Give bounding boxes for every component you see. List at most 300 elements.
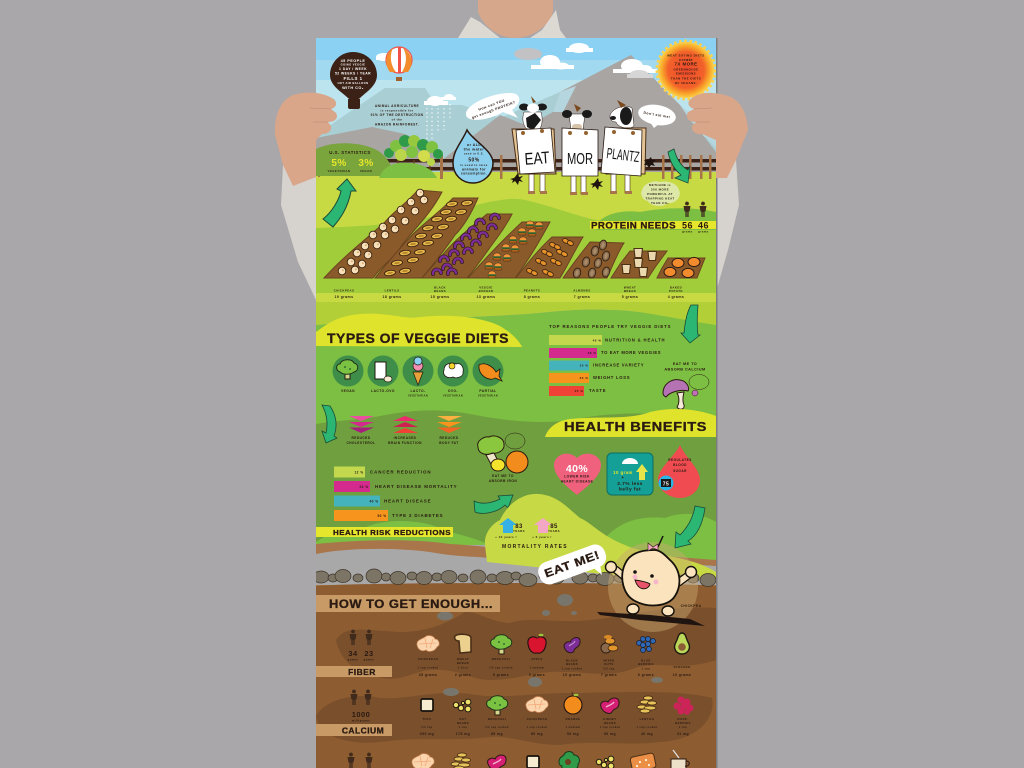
row labels strip: VEGGIE <box>479 286 493 290</box>
calcium food: chickpeas: 1 cup cooked <box>527 726 547 729</box>
poster edge <box>716 38 718 768</box>
mushroom calcium: ABSORB CALCIUM <box>664 368 706 372</box>
row: chickpeas <box>324 189 442 278</box>
calcium food: tofu: TOFU <box>422 717 432 721</box>
calcium food: chickpeas: CHICKPEAS <box>527 717 547 721</box>
icon: ovo fried egg: OVO- <box>448 389 458 393</box>
bar: heart disease: 40 % <box>369 500 379 504</box>
sun statistic: GREENHOUSE <box>673 68 699 72</box>
arrow: female years <box>534 518 552 533</box>
row labels strip: BLACK <box>434 286 446 290</box>
fiber food: avocado <box>673 633 691 677</box>
calcium food: kidney beans: KIDNEY <box>603 717 617 721</box>
lower hills <box>316 521 490 545</box>
fiber food: chickpeas: 1 cup cooked <box>418 666 438 670</box>
fiber food: blueberries <box>636 636 656 677</box>
methane cloud: THAN CO₂ <box>651 201 669 205</box>
neck <box>478 0 553 38</box>
left sleeve <box>281 165 317 302</box>
rainforest statistic: of the <box>392 118 402 122</box>
row: lentils <box>375 198 478 278</box>
U.S. statistics hill <box>316 143 392 176</box>
right hand <box>687 93 748 178</box>
bar: veggies <box>549 348 661 358</box>
bathroom scale: + <box>622 475 625 480</box>
water drop statistic: or ALL <box>467 143 481 147</box>
cow flies <box>510 157 656 190</box>
calcium food: kidney beans: 50 mg <box>604 732 616 736</box>
hot air balloon with cloud <box>376 47 412 81</box>
sky bands <box>316 38 716 137</box>
cow 1 with EAT sign: EAT <box>524 148 550 169</box>
green arrow: right <box>474 495 513 513</box>
row labels strip <box>316 286 716 302</box>
triangles: body fat: BODY FAT <box>439 441 459 445</box>
fiber food: avocado: AVOCADO <box>673 665 691 669</box>
cow 2 with MOR sign: MOR <box>567 151 593 168</box>
calcium food: orange: 52 mg <box>567 732 579 736</box>
eat me bubble <box>535 542 609 587</box>
mid band hills <box>316 302 716 325</box>
bar: taste <box>549 386 606 396</box>
row labels strip: 8 grams <box>524 295 540 299</box>
fiber needs: 23 <box>364 649 374 658</box>
mushroom calcium <box>663 362 709 409</box>
dark balloon statistic <box>330 52 377 109</box>
bar: variety <box>549 360 644 370</box>
U.S. statistics hill: 3% <box>358 158 374 169</box>
sun statistic: OF VEGANS. <box>675 81 697 85</box>
bar: cancer <box>334 466 431 478</box>
calcium food: kidney beans <box>600 698 620 736</box>
left hand <box>275 93 337 186</box>
benefit triangles <box>346 416 462 445</box>
broccoli iron group <box>478 433 528 483</box>
calcium band <box>316 724 392 736</box>
cow 1 with EAT sign <box>512 96 556 194</box>
fiber food: avocado: 10 grams <box>673 673 691 677</box>
row labels strip: BEANS <box>434 289 446 293</box>
green arrow: left <box>322 405 337 443</box>
row labels strip: 18 grams <box>383 295 401 299</box>
stones <box>313 569 716 586</box>
icon: lacto-ovo milk: LACTO-OVO <box>371 389 395 393</box>
calcium food: raspberries: RASP- <box>678 717 688 721</box>
chickpea label: CHICKPEA <box>681 604 702 608</box>
speech bubble: protein question: get enough PROTEIN? <box>471 100 516 120</box>
water drop statistic: used in U.S. <box>464 152 484 156</box>
sun statistic: EMISSIONS <box>676 72 696 76</box>
fiber food: black beans: BEANS <box>566 662 578 666</box>
person holding the poster <box>281 0 739 302</box>
bar: nutrition <box>549 335 665 345</box>
chickpea character <box>597 536 705 632</box>
fiber food: mixed nuts: MIXED <box>603 658 615 662</box>
row labels strip: POTATO <box>669 289 683 293</box>
row labels strip: BREAD <box>624 289 636 293</box>
mushroom calcium: EAT ME TO <box>673 362 697 366</box>
speech bubble: protein question: How can YOU <box>478 98 505 112</box>
row labels strip: ALMONDS <box>573 288 591 292</box>
fiber food: mixed nuts <box>601 635 618 677</box>
fiber needs: 34 <box>348 649 358 658</box>
mortality rates: YEARS <box>513 529 525 533</box>
calcium food: tofu: 350 mg <box>420 732 434 736</box>
fiber food: wheat bread: 2 grams <box>455 673 471 677</box>
mortality rates: 83 <box>515 524 523 530</box>
fiber food: broccoli: 1/2 cup cooked <box>489 666 513 670</box>
row labels strip: CHICKPEAS <box>334 288 354 292</box>
fiber food: wheat bread: BREAD <box>457 661 469 665</box>
top reasons chart <box>549 324 671 396</box>
dark balloon statistic: HOT AIR BALLOON <box>338 81 368 85</box>
calcium food: tofu <box>420 699 434 736</box>
fiber food: apple: 5 grams <box>529 673 545 677</box>
protein needs band: 56 <box>682 220 693 230</box>
calcium food: broccoli: 89 mg <box>491 732 503 736</box>
icon: ovo fried egg <box>438 356 468 398</box>
bar: diabetes: TYPE 2 DIABETES <box>392 513 443 518</box>
calcium food: broccoli: BROCCOLI <box>488 717 506 721</box>
eat me bubble: EAT ME! <box>543 549 602 580</box>
speech bubble: don't eat me <box>638 104 676 128</box>
protein needs band <box>590 202 716 234</box>
rainforest statistic: 91% OF THE DESTRUCTION <box>371 113 424 117</box>
icon: lacto ice cream <box>402 356 434 398</box>
calcium food: soy beans: SOY <box>459 717 467 721</box>
U.S. statistics hill: VEGETARIAN <box>328 169 350 173</box>
fiber needs: grams <box>348 658 358 662</box>
triangles: cholesterol: CHOLESTEROL <box>346 441 376 445</box>
bathroom scale: 3.7% less <box>617 481 643 487</box>
bathroom scale: belly fat <box>619 486 641 492</box>
row: almonds <box>563 239 624 279</box>
fiber food: apple <box>528 634 546 677</box>
health benefit heart: 40% <box>566 463 588 475</box>
bar: heart disease <box>334 496 431 506</box>
water drop statistic: the water <box>464 148 484 152</box>
grey mountains <box>316 55 716 180</box>
soil top strip <box>316 540 716 600</box>
sun statistic: MEAT EATING DIETS <box>667 54 705 58</box>
dark balloon statistic: FILLS 1 <box>343 76 363 81</box>
rainforest statistic: is responsible for <box>380 108 414 112</box>
rainforest statistic: AMAZON RAINFOREST. <box>375 122 419 126</box>
bar: taste: 25 % <box>575 389 583 393</box>
fiber food: wheat bread: 1 slice <box>458 666 468 670</box>
fence <box>316 155 716 179</box>
bar: heart mortality <box>334 481 457 492</box>
fiber band <box>316 666 392 677</box>
stray soil rocks <box>437 594 663 696</box>
row labels strip: LENTILS <box>385 288 399 292</box>
trees <box>379 135 443 178</box>
fiber food: chickpeas: CHICKPEAS <box>418 657 438 661</box>
blood drop: REGULATES <box>668 458 692 462</box>
icon: lacto ice cream: LACTO- <box>410 389 426 393</box>
grass field <box>316 172 716 228</box>
methane cloud: 30X MORE <box>651 188 669 192</box>
calcium food: lentils: 40 mg <box>641 732 653 736</box>
protein needs band: 46 <box>698 220 709 230</box>
mortality rates: 85 <box>550 524 558 530</box>
fiber food: blueberries: BERRIES <box>638 662 654 666</box>
bar: cancer: CANCER REDUCTION <box>370 470 431 474</box>
fiber food: wheat bread: WHEAT <box>457 657 469 661</box>
row labels strip: PEANUTS <box>524 288 540 292</box>
methane cloud <box>641 181 680 206</box>
bar: heart mortality: 24 % <box>359 485 369 489</box>
mortality rates <box>495 518 567 550</box>
fiber food: blueberries: 1 cup <box>642 668 650 670</box>
triangles: cholesterol: REDUCED <box>352 436 371 440</box>
top reasons chart: TOP REASONS PEOPLE TRY VEGGIE DIETS <box>549 324 671 329</box>
calcium food: broccoli <box>485 696 509 736</box>
green arrow: methane <box>668 149 690 183</box>
mortality hill <box>485 494 716 580</box>
green arrow: to chickpea <box>675 506 705 548</box>
blood drop: BLOOD <box>673 463 687 467</box>
calcium food: raspberries: BERRIES <box>675 721 691 725</box>
broccoli iron group: ABSORB IRON <box>489 479 517 483</box>
blood drop: 75 <box>663 482 669 488</box>
pale back mountains <box>316 88 716 180</box>
speech bubble: don't eat me: Don't eat me! <box>643 111 671 119</box>
speech bubble: protein question <box>466 93 519 120</box>
calcium needs: 1000 <box>352 710 370 719</box>
shirt collar <box>458 10 566 38</box>
fiber food: black beans <box>562 638 582 677</box>
triangles: body fat: REDUCED <box>440 436 459 440</box>
triangles: brain: BRAIN FUNCTION <box>388 441 422 445</box>
calcium needs <box>350 690 372 722</box>
icon: partial fish <box>472 356 504 398</box>
fiber band: FIBER <box>348 667 376 677</box>
calcium band: CALCIUM <box>342 726 384 736</box>
green arrow: top right <box>681 305 700 343</box>
grey road <box>316 549 716 585</box>
sun statistic: 7X MORE <box>675 62 697 66</box>
mortality rates: + 6 years ! <box>532 535 552 539</box>
mortality rates: MORTALITY RATES <box>502 544 567 550</box>
icon: lacto-ovo milk <box>368 356 398 393</box>
calcium food: chickpeas: 80 mg <box>531 732 543 736</box>
health risk bars <box>334 466 457 521</box>
fiber food: broccoli: BROCCOLI <box>492 657 510 661</box>
methane cloud: METHANE is <box>649 183 671 187</box>
bar: diabetes <box>334 510 443 521</box>
darker field hills <box>316 199 716 300</box>
row labels strip: 19 grams <box>335 295 353 299</box>
fiber food: chickpeas: 35 grams <box>419 673 437 677</box>
bar: heart disease: HEART DISEASE <box>384 498 431 504</box>
cow 3 with PLANTZ sign <box>601 100 646 194</box>
diet icons <box>332 356 504 398</box>
fiber needs <box>348 630 374 662</box>
bar: weight loss: WEIGHT LOSS <box>593 375 630 380</box>
green arrow: field <box>323 179 356 227</box>
water drop statistic <box>453 130 493 183</box>
sun statistic: THAN THE DIETS <box>671 76 701 80</box>
U.S. statistics hill: VEGAN <box>360 169 372 173</box>
bar: weight loss <box>549 373 630 383</box>
dark balloon statistic: 45 PEOPLE <box>341 59 365 63</box>
broccoli iron group: EAT ME TO <box>492 474 514 478</box>
calcium food: raspberries: 1 cup <box>679 726 687 729</box>
calcium food: orange <box>564 692 582 736</box>
triangles: brain: INCREASED <box>394 436 417 440</box>
protein needs band: grams <box>698 230 709 234</box>
icon: ovo fried egg: VEGETARIAN <box>443 394 463 398</box>
bathroom scale <box>607 453 653 495</box>
calcium food: kidney beans: BEANS <box>604 721 616 725</box>
water drop statistic: animals for <box>462 168 486 172</box>
row labels strip: BAKED <box>670 286 682 290</box>
calcium food: raspberries: 31 mg <box>677 732 689 736</box>
icon: partial fish: VEGETARIAN <box>478 394 498 398</box>
dark balloon statistic: WITH CO₂ <box>342 86 364 90</box>
dark balloon statistic: 52 WEEKS / YEAR <box>335 72 371 76</box>
blood drop: SUGAR <box>673 469 687 473</box>
sun statistic <box>658 42 714 98</box>
health benefits heading <box>545 409 716 437</box>
calcium needs: milligrams <box>352 718 370 722</box>
icon: vegan broccoli <box>332 356 364 393</box>
dark balloon statistic: 1 DAY / WEEK <box>339 67 367 71</box>
fiber food: apple: APPLE <box>531 657 543 661</box>
bar: taste: TASTE <box>589 388 606 393</box>
health benefit heart: HEART DISEASE <box>561 480 594 484</box>
row: peanuts <box>516 237 583 278</box>
health risk band: HEALTH RISK REDUCTIONS <box>333 528 451 537</box>
fiber row <box>316 630 691 677</box>
bar: nutrition: 46 % <box>593 338 601 342</box>
water drop statistic: is used to raise <box>460 163 488 167</box>
iron row <box>348 750 689 768</box>
row labels strip: WHEAT <box>624 286 636 290</box>
icon: lacto ice cream: VEGETARIAN <box>408 394 428 398</box>
row: wheat bread <box>611 248 667 278</box>
row labels strip: 15 grams <box>431 295 449 299</box>
fiber food: mixed nuts: 7 grams <box>601 673 617 677</box>
soil base <box>316 583 716 768</box>
arrow: male years <box>499 518 517 533</box>
bar: variety: 33 % <box>580 364 588 368</box>
rainforest statistic: ANIMAL AGRICULTURE <box>375 104 419 108</box>
methane cloud: POWERFUL AT <box>647 192 673 196</box>
fiber food: chickpeas <box>417 636 439 677</box>
fiber food: broccoli: 5 grams <box>493 673 509 677</box>
planting rows <box>324 189 705 279</box>
right sleeve <box>716 160 739 292</box>
fiber food: mixed nuts: 2/3 cup <box>603 668 615 670</box>
fiber food: mixed nuts: NUTS <box>604 662 614 666</box>
calcium food: lentils: LENTILS <box>640 717 654 721</box>
water drop statistic: 50% <box>468 158 480 164</box>
calcium food: orange: ORANGE <box>566 717 580 721</box>
olive mid section <box>316 410 716 545</box>
fiber needs: grams <box>364 658 374 662</box>
bar: heart mortality: HEART DISEASE MORTALITY <box>375 484 457 489</box>
right hills <box>600 514 716 575</box>
cow 2 with MOR sign <box>562 104 598 195</box>
clouds <box>424 43 657 106</box>
how to get enough band <box>316 595 500 612</box>
calcium food: soy beans: 175 mg <box>456 732 470 736</box>
fiber food: blueberries: BLUE <box>641 658 651 662</box>
green mid section <box>316 310 716 424</box>
health benefit heart <box>554 454 601 495</box>
fiber food: black beans: BLACK <box>566 658 578 662</box>
health benefit heart: LOWER RISK <box>564 474 590 478</box>
rainforest statistic <box>371 104 450 142</box>
triangles: body fat <box>437 416 462 445</box>
fiber food: blueberries: 6 grams <box>638 673 654 677</box>
calcium food: broccoli: 1/2 cup cooked <box>485 726 509 729</box>
fiber food: black beans: 15 grams <box>563 673 581 677</box>
calcium row <box>316 690 694 736</box>
dark soil waves <box>316 608 716 745</box>
mortality rates: + 10 years ! <box>495 535 517 539</box>
calcium food: raspberries <box>674 696 694 736</box>
how to get enough band: HOW TO GET ENOUGH... <box>329 599 493 611</box>
calcium food: tofu: 1/2 cup <box>421 726 433 729</box>
poster <box>313 38 716 768</box>
protein needs band: grams <box>682 230 693 234</box>
row labels strip: BURGER <box>479 289 493 293</box>
water drop statistic: consumption. <box>461 172 487 176</box>
row labels strip: 7 grams <box>574 295 590 299</box>
fiber food: black beans: 1 cup cooked <box>562 668 582 670</box>
calcium food: kidney beans: 1 cup cooked <box>600 726 620 729</box>
veggie diets heading: TYPES OF VEGGIE DIETS <box>327 331 509 346</box>
calcium food: lentils: 1 cup cooked <box>637 726 657 729</box>
icon: partial fish: PARTIAL <box>479 389 497 393</box>
calcium food: soy beans <box>453 699 471 736</box>
U.S. statistics hill: 5% <box>331 158 347 169</box>
calcium food: soy beans: 1 cup <box>459 726 467 729</box>
row labels strip: 5 grams <box>622 295 638 299</box>
calcium food: chickpeas <box>526 697 548 736</box>
bar: nutrition: NUTRITION & HEALTH <box>605 338 665 342</box>
bar: diabetes: 50 % <box>377 514 387 518</box>
protein needs hill <box>596 208 716 230</box>
cow 3 with PLANTZ sign: PLANTZ <box>606 145 640 166</box>
veggie diets heading <box>316 314 522 347</box>
row: veggie burger <box>468 221 550 278</box>
calcium food: orange: 1 medium <box>566 726 580 729</box>
fiber food: broccoli <box>489 635 513 677</box>
bar: cancer: 12 % <box>354 470 364 474</box>
bar: weight loss: 33 % <box>580 376 588 380</box>
fiber food: apple: 1 medium <box>530 666 544 670</box>
icon: vegan broccoli: VEGAN <box>341 389 355 393</box>
fiber food: wheat bread <box>455 634 471 677</box>
bar: veggies: 38 % <box>588 351 596 355</box>
dark balloon statistic: GOING VEGGIE <box>341 62 365 66</box>
triangles: cholesterol <box>346 416 376 445</box>
blood drop <box>658 445 700 498</box>
U.S. statistics hill: U.S. STATISTICS <box>329 150 371 155</box>
protein needs band: PROTEIN NEEDS <box>591 220 676 232</box>
calcium food: lentils <box>637 696 657 736</box>
bar: veggies: TO EAT MORE VEGGIES <box>601 350 661 355</box>
mortality rates: YEARS <box>548 529 560 533</box>
bar: variety: INCREASE VARIETY <box>593 362 644 368</box>
sun statistic: create <box>679 58 693 62</box>
row: black beans <box>422 214 512 278</box>
row labels strip: 4 grams <box>668 295 684 299</box>
